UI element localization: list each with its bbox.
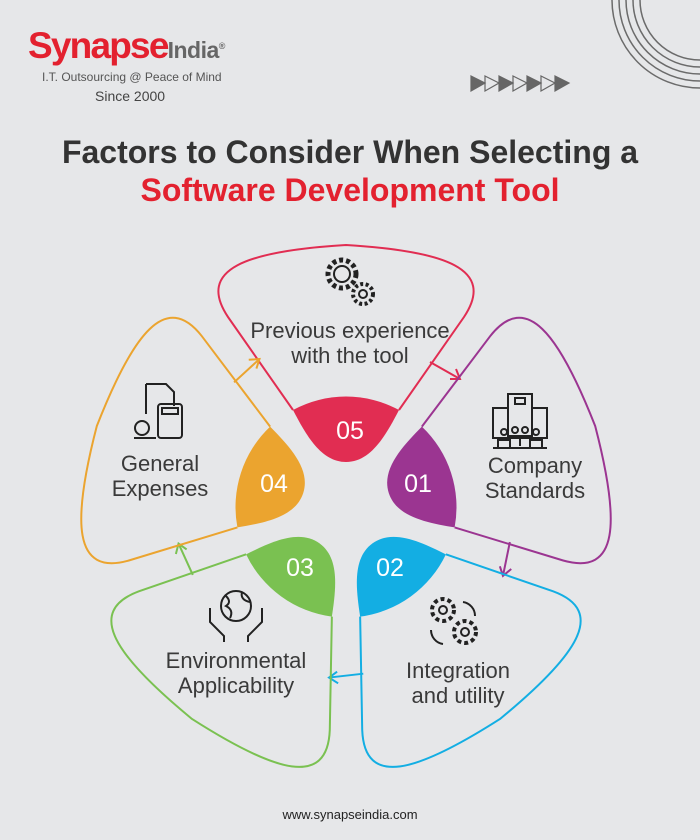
loop 03 green: [89, 510, 392, 794]
numbers: 03: [286, 554, 314, 582]
segment 04: [225, 422, 320, 544]
numbers: 04: [260, 470, 288, 498]
loop 05 red: [218, 245, 474, 410]
logo: SynapseIndia®: [28, 25, 224, 66]
segment 02: [330, 512, 454, 628]
numbers: 01: [404, 470, 432, 498]
text: Company Standards: Standards: [485, 478, 585, 503]
icon: globe in hands: [210, 591, 262, 642]
logo: Since 2000: [95, 88, 165, 104]
loop 01 purple: [399, 305, 635, 598]
text: Previous experience: [250, 318, 450, 368]
icon: integration gears: [431, 599, 476, 644]
segment 05: [293, 397, 399, 462]
segment 01: [372, 422, 467, 544]
logo: I.T. Outsourcing @ Peace of Mind: [42, 70, 222, 84]
numbers: [260, 417, 432, 582]
text: Company Standards: Company: [488, 453, 582, 478]
text: Environmental: Applicability: [178, 673, 294, 698]
decorative arcs top right: [611, 0, 700, 89]
text: Integration: and utility: [412, 683, 504, 708]
text: General Expenses: General: [121, 451, 199, 476]
text: Previous experience: Previous experience: [250, 318, 450, 343]
segment 03: [238, 512, 362, 628]
icon: gears: [328, 260, 373, 304]
numbers: 05: [336, 417, 364, 445]
text: Integration: Integration: [406, 658, 510, 683]
text: General Expenses: Expenses: [112, 476, 208, 501]
text: Environmental: Environmental: [166, 648, 306, 673]
text: Previous experience: with the tool: [291, 343, 409, 368]
title: [62, 134, 638, 208]
footer url: www.synapseindia.com: [282, 807, 418, 822]
loop 02 blue: [300, 510, 603, 794]
icon: building: [493, 394, 547, 448]
text: Environmental: [166, 648, 306, 698]
text: General Expenses: [112, 451, 208, 501]
icon: calculator: [134, 384, 182, 438]
title: Software Development Tool: [140, 172, 560, 208]
logo: [28, 25, 226, 104]
title: Factors to Consider When Selecting a: [62, 134, 638, 170]
loop 04 orange: [57, 305, 293, 598]
arrow triangles: [470, 75, 570, 92]
text: Company Standards: [485, 453, 585, 503]
numbers: 02: [376, 554, 404, 582]
text: Integration: [406, 658, 510, 708]
